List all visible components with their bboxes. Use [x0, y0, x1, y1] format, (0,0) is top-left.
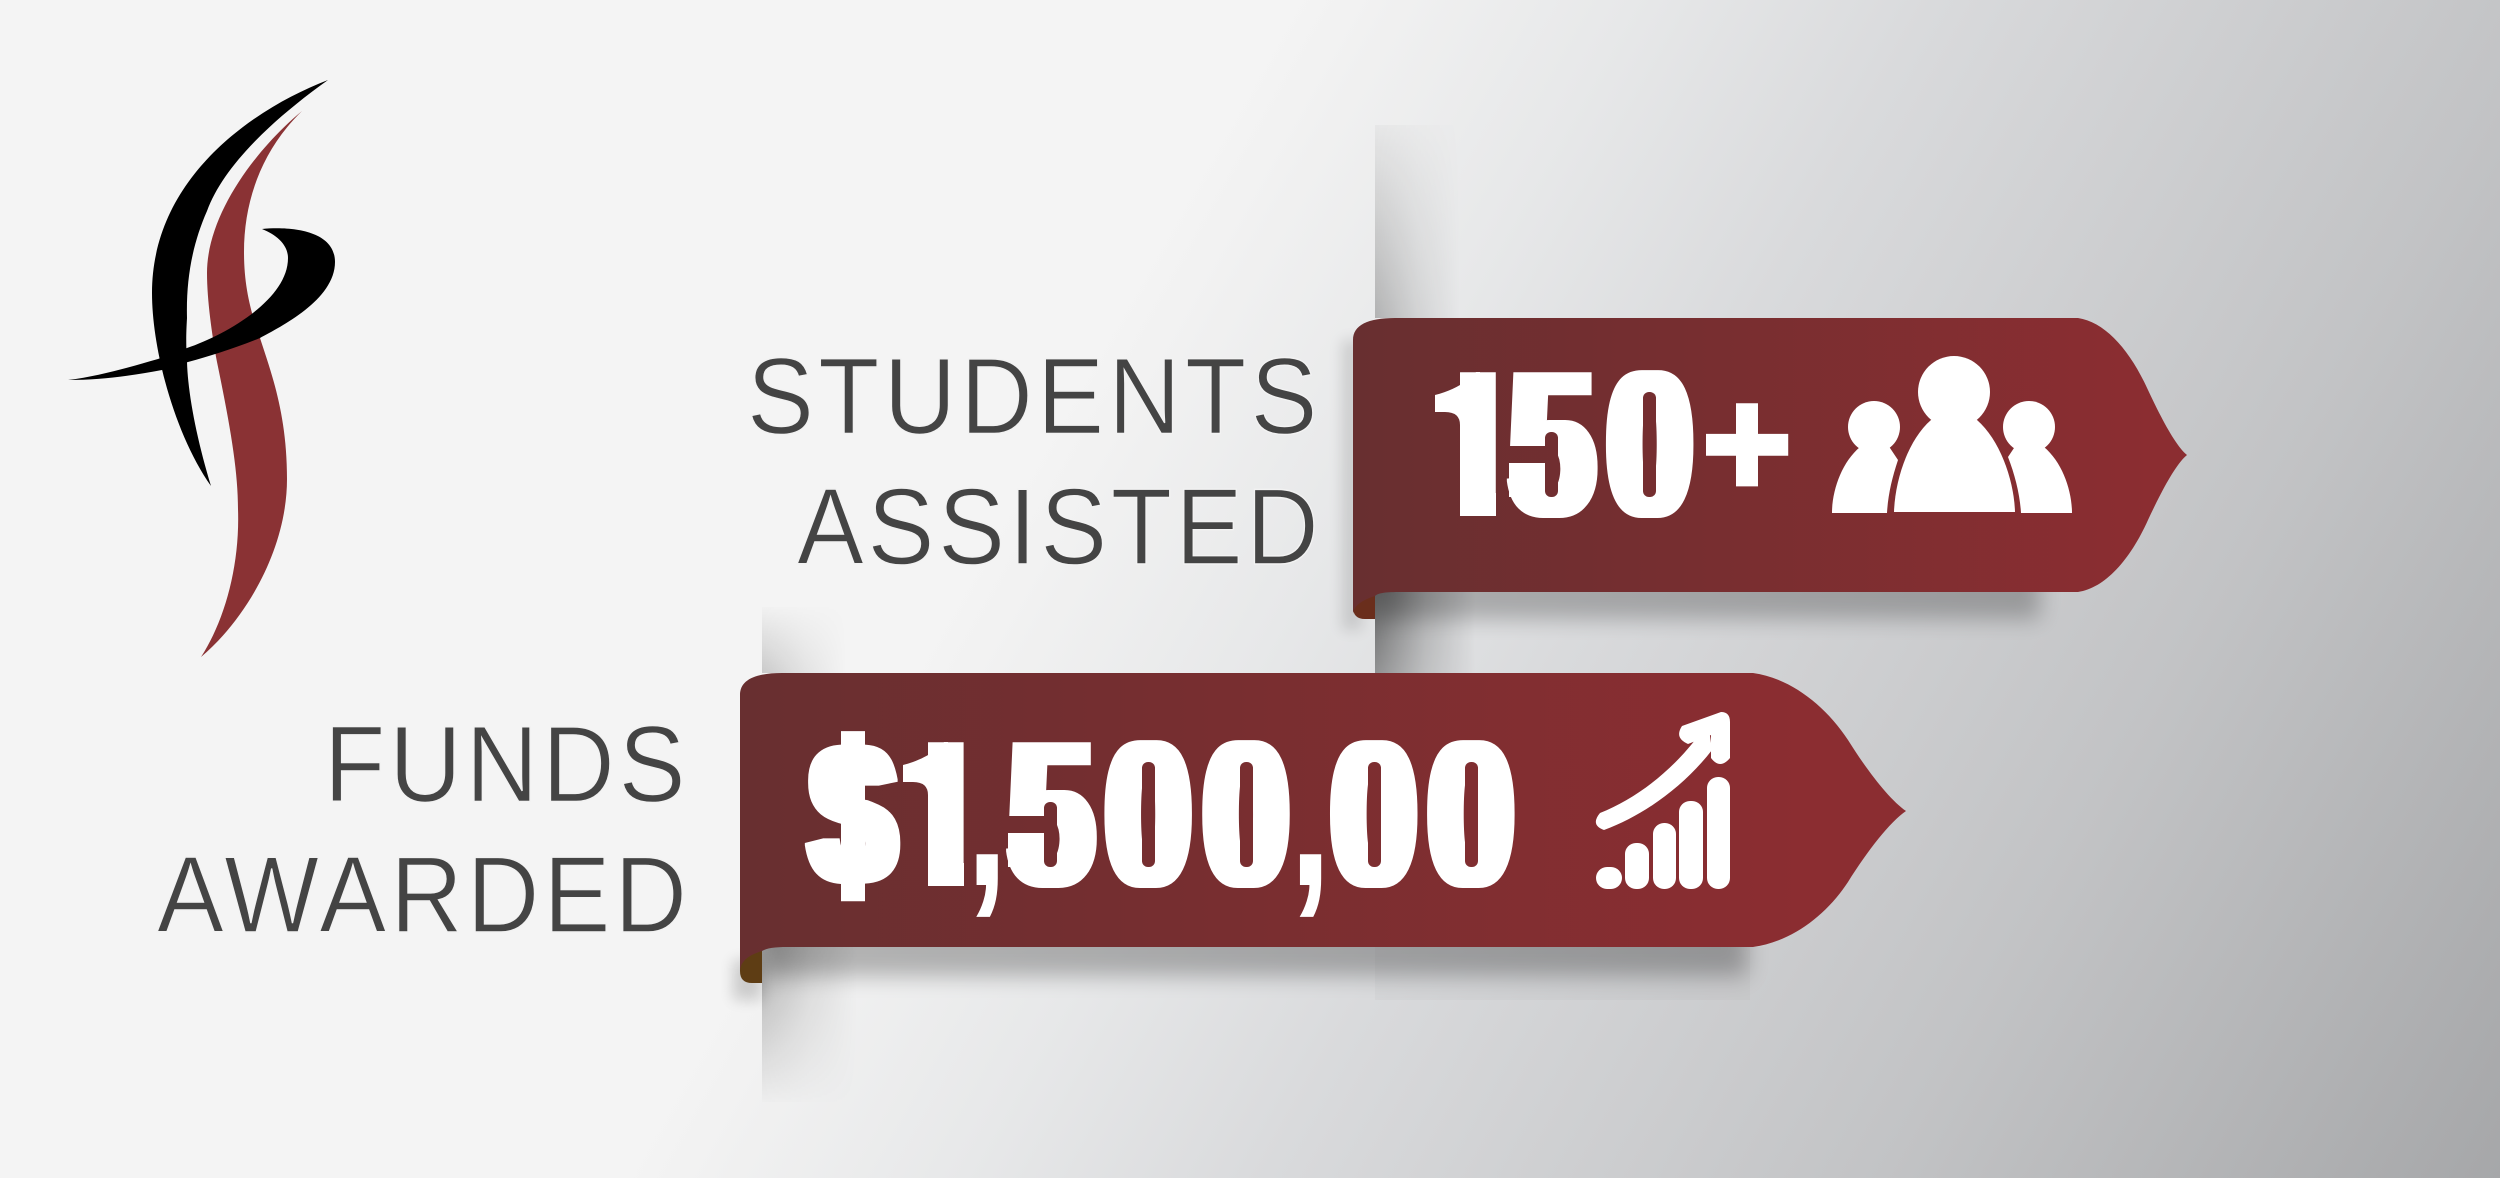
heading: funds awarded: AWARDED	[157, 834, 687, 956]
ribbon: funds awarded	[740, 673, 1906, 983]
ribbon: students assisted	[1353, 318, 2187, 619]
heading: funds awarded	[157, 704, 687, 956]
heading: funds awarded: FUNDS	[324, 704, 686, 825]
value: $1,500,00: ,,	[966, 700, 1331, 930]
icon: three people	[1832, 356, 2072, 513]
value: 150+: 1	[1432, 330, 1516, 560]
shadow: first ribbon panel edge	[1342, 125, 2040, 673]
value: $1,500,00: $50000	[811, 700, 1513, 930]
shadow: second ribbon panel edge	[733, 607, 1750, 1102]
icon: growth bars with arrow	[1596, 712, 1730, 889]
heading: students assisted: STUDENTS	[747, 336, 1317, 457]
heading: students assisted	[747, 336, 1319, 588]
value: 150+	[1420, 330, 1792, 560]
heading: students assisted: ASSISTED	[797, 466, 1319, 588]
logo	[68, 80, 335, 657]
value: $1,500,00: 1	[900, 700, 984, 930]
value: 150+: +	[1702, 357, 1792, 529]
value: 150+: 50	[1510, 330, 1692, 560]
